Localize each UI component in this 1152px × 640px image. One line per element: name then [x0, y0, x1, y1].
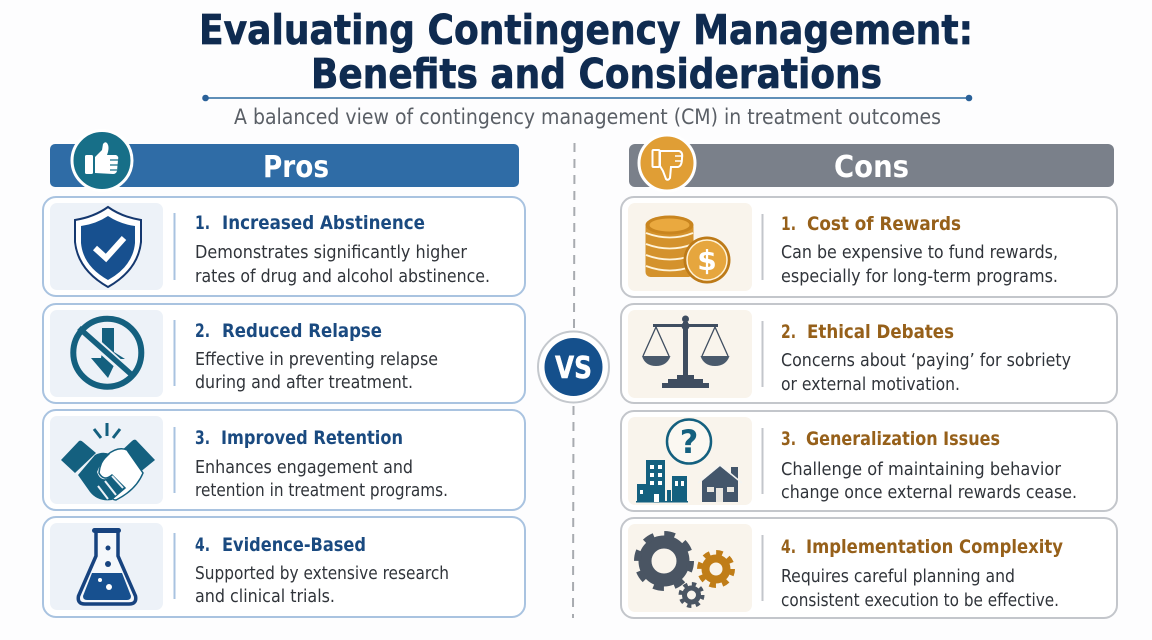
card: ethical debates: or external motivation. [781, 375, 960, 395]
pros header [50, 144, 519, 187]
card: reduced relapse: during and after treatment. [195, 373, 413, 393]
icon: handshake [61, 423, 155, 500]
card: increased abstinence: Demonstrates significantly higher [195, 243, 468, 263]
card: evidence-based: Evidence-Based [222, 534, 366, 556]
card: cost of rewards: Cost of Rewards [807, 213, 961, 235]
card: increased abstinence [43, 197, 525, 296]
card: implementation complexity: Requires careful planning and [781, 567, 1015, 587]
card: ethical debates: Ethical Debates [807, 321, 954, 343]
title [199, 6, 973, 98]
VS badge [538, 332, 609, 402]
icon: coins [646, 216, 730, 284]
card: generalization issues: Challenge of maintaining behavior [781, 460, 1062, 480]
card: ethical debates [621, 304, 1117, 403]
card: implementation complexity [621, 518, 1117, 618]
card: generalization issues: change once external rewards cease. [781, 483, 1077, 503]
card: improved retention: Improved Retention [221, 427, 403, 449]
cons header: Cons [834, 150, 909, 185]
subtitle: A balanced view of contingency management (CM) in treatment outcomes [234, 105, 941, 129]
card: implementation complexity: consistent execution to be effective. [781, 591, 1059, 611]
card: increased abstinence: 1. [195, 212, 210, 234]
card: increased abstinence: rates of drug and alcohol abstinence. [195, 267, 490, 287]
icon: thumbs up [72, 130, 132, 190]
card: improved retention: retention in treatment programs. [195, 481, 448, 501]
icon: question and buildings [636, 420, 742, 502]
icon: thumbs down [639, 135, 695, 191]
panel: cons [621, 135, 1117, 618]
card: evidence-based: Supported by extensive research [195, 564, 449, 584]
cons header [629, 144, 1114, 187]
title: Benefits and Considerations [311, 50, 882, 98]
card: reduced relapse: Reduced Relapse [222, 320, 382, 342]
icon: flask [78, 528, 136, 604]
card: reduced relapse [43, 304, 525, 403]
icon: gears [638, 534, 732, 606]
icon: no relapse [73, 319, 141, 387]
card: increased abstinence: Increased Abstinence [222, 212, 425, 234]
pros header: Pros [263, 150, 329, 185]
card: reduced relapse: Effective in preventing relapse [195, 350, 438, 370]
card: evidence-based [43, 517, 525, 617]
card: cost of rewards [621, 197, 1117, 297]
card: implementation complexity: 4. [781, 536, 796, 558]
card: evidence-based: 4. [195, 534, 210, 556]
center dashed divider [573, 143, 574, 618]
title rule [202, 95, 972, 101]
panel: pros [43, 130, 525, 617]
card: generalization issues: Generalization Issues [806, 428, 1000, 450]
icon: balance scale [642, 316, 730, 388]
card: cost of rewards: 1. [781, 213, 796, 235]
card: generalization issues: 3. [781, 428, 796, 450]
card: ethical debates: 2. [781, 321, 796, 343]
card: cost of rewards: especially for long-term programs. [781, 267, 1058, 287]
title: Evaluating Contingency Management: [199, 6, 973, 54]
card: cost of rewards: Can be expensive to fund rewards, [781, 243, 1058, 263]
card: improved retention: Enhances engagement and [195, 458, 413, 478]
card: improved retention: 3. [195, 427, 210, 449]
icon: question and buildings: ? [680, 423, 698, 461]
VS badge: VS [555, 351, 592, 386]
card: reduced relapse: 2. [195, 320, 210, 342]
card: improved retention [43, 410, 525, 510]
icon: shield [75, 207, 141, 287]
card: implementation complexity: Implementation Complexity [806, 536, 1064, 558]
card: evidence-based: and clinical trials. [195, 587, 335, 607]
card: ethical debates: Concerns about ‘paying’ for sobriety [781, 351, 1071, 371]
icon: coins: $ [697, 244, 717, 277]
card: generalization issues [621, 411, 1117, 511]
